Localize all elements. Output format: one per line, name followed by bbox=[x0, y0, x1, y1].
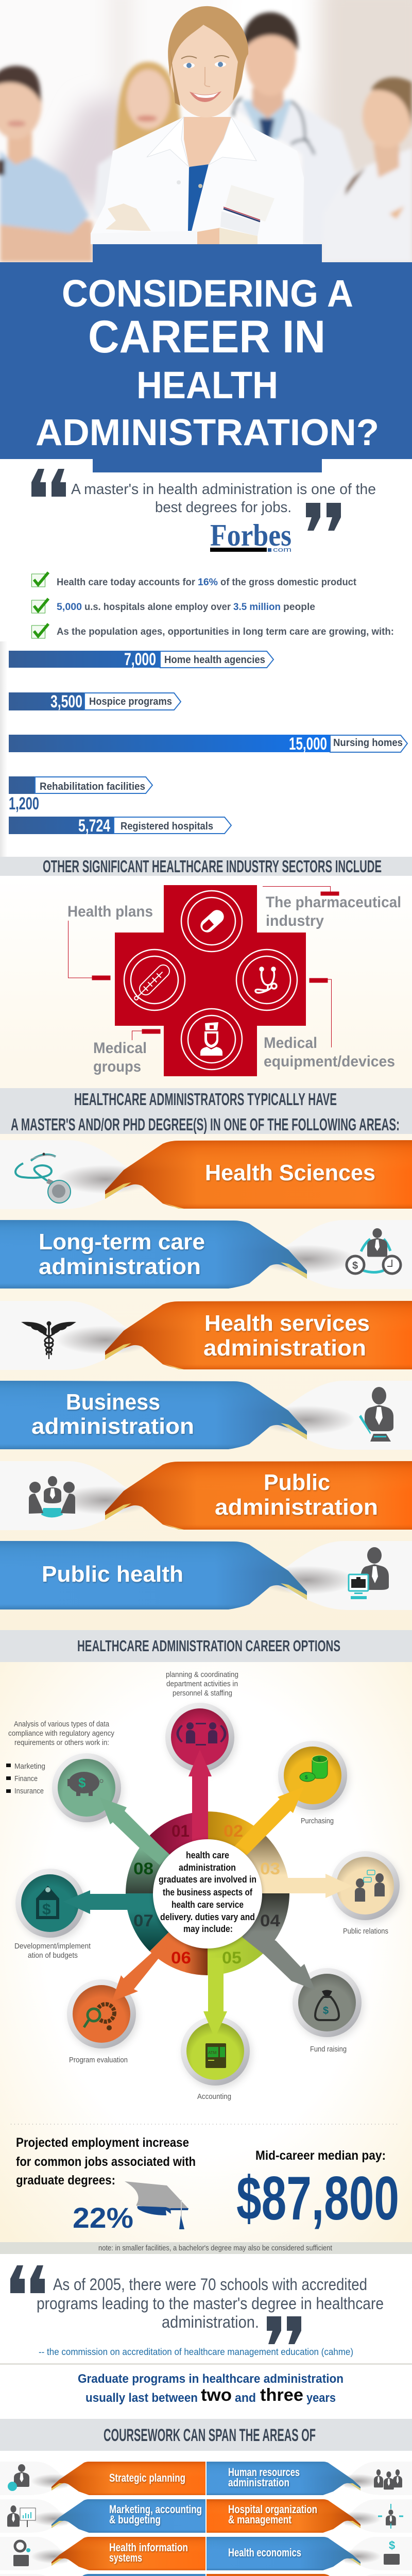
option descriptions bbox=[6, 1670, 388, 2101]
icon: atm bbox=[205, 2043, 226, 2068]
connector lines bbox=[68, 886, 339, 1047]
center doctor bbox=[91, 6, 304, 244]
ribbon: health services administration bbox=[0, 1301, 412, 1370]
icon: piggy bank bbox=[67, 1772, 103, 1796]
sector labels: Medical bbox=[93, 1040, 147, 1057]
blonde nurse, blurred bbox=[94, 62, 181, 216]
icon: magnifier and gear bbox=[84, 2004, 114, 2030]
quote: forbes bbox=[31, 469, 376, 531]
title banner: CONSIDERING A bbox=[62, 272, 353, 315]
bar chart: long term care facilities: Rehabilitation facilities bbox=[40, 781, 145, 792]
sector labels: equipment/devices bbox=[264, 1053, 395, 1070]
option descriptions: ation of budgets bbox=[28, 1951, 78, 1960]
sector labels: Medical bbox=[264, 1035, 317, 1052]
heading: coursework bbox=[0, 2419, 412, 2451]
sector labels: industry bbox=[266, 912, 324, 929]
row 1: Strategic planning bbox=[109, 2471, 185, 2484]
segment numbers: 06 bbox=[171, 1948, 191, 1967]
icon: pill bbox=[198, 907, 227, 935]
icon: stethoscope bbox=[15, 1153, 71, 1203]
note band bbox=[0, 2242, 412, 2254]
ribbon: long-term care: Long-term care bbox=[39, 1229, 205, 1255]
option descriptions: Development/implement bbox=[14, 1942, 91, 1951]
checklist facts: As the population ages, opportunities in long term care are growing, with: bbox=[57, 626, 394, 637]
ribbon: public health: Public health bbox=[42, 1562, 183, 1587]
ribbon: long-term care: administration bbox=[39, 1254, 201, 1279]
program length text: years bbox=[306, 2391, 336, 2405]
forbes logo: Forbes bbox=[210, 518, 291, 552]
forbes logo: com bbox=[273, 546, 291, 553]
center circle text: may include: bbox=[183, 1924, 233, 1934]
icon: money bag bbox=[315, 1990, 339, 2020]
option descriptions: compliance with regulatory agency bbox=[8, 1729, 114, 1738]
program length text: usually last between bbox=[85, 2391, 198, 2405]
segment numbers: 07 bbox=[133, 1911, 153, 1930]
stat: mid-career median pay: Mid-career median pay: bbox=[255, 2148, 386, 2163]
center circle text: administration bbox=[179, 1862, 236, 1873]
program length text: and bbox=[235, 2391, 256, 2405]
icon: nurse bbox=[200, 1022, 222, 1056]
bar chart: long term care facilities: Registered hospitals bbox=[121, 821, 213, 832]
segment numbers: 02 bbox=[224, 1822, 243, 1840]
row 3: Health information bbox=[109, 2541, 188, 2554]
ribbon: health services administration: Health services bbox=[204, 1311, 370, 1336]
stat: projected employment increase bbox=[16, 2136, 196, 2234]
icon: person, dollar and clock bbox=[347, 1228, 401, 1274]
bar chart: long term care facilities: 5,724 bbox=[78, 816, 110, 836]
checklist facts: 16% bbox=[198, 577, 218, 588]
bar chart: long term care facilities: 3,500 bbox=[50, 692, 82, 711]
option descriptions: Analysis of various types of data bbox=[14, 1720, 110, 1728]
icon: coins: $ bbox=[305, 1775, 308, 1781]
bar chart: long term care facilities: Home health agencies bbox=[164, 654, 265, 666]
arrows bbox=[63, 1750, 352, 2038]
center circle text: graduates are involved in bbox=[159, 1874, 256, 1885]
title banner: ADMINISTRATION? bbox=[36, 412, 379, 453]
option descriptions: Accounting bbox=[197, 2092, 231, 2101]
program length text: three bbox=[260, 2385, 303, 2405]
sector labels: groups bbox=[93, 1058, 141, 1075]
option descriptions: Finance bbox=[14, 1774, 38, 1783]
program length text: Graduate programs in healthcare administration bbox=[78, 2372, 344, 2386]
icon: caduceus bbox=[21, 1321, 76, 1359]
option descriptions: personnel & staffing bbox=[173, 1689, 232, 1698]
option descriptions: requirements or others work in: bbox=[14, 1738, 109, 1747]
checklist facts: u.s. hospitals alone employ over bbox=[84, 602, 231, 613]
row 3: systems bbox=[109, 2551, 142, 2564]
icon: person, dollar and clock: $ bbox=[352, 1260, 358, 1272]
checklist facts: people bbox=[283, 602, 315, 613]
quote: accredited schools: administration. bbox=[162, 2313, 259, 2331]
icon: two people meeting bbox=[176, 1722, 227, 1745]
row 4 bbox=[0, 2574, 412, 2576]
bar chart: long term care facilities: Nursing homes bbox=[333, 737, 403, 749]
left nurse, blurred bbox=[0, 66, 93, 262]
row 2: Marketing, accounting bbox=[109, 2503, 202, 2516]
bar chart: long term care facilities: 15,000 bbox=[289, 734, 327, 754]
hero photo: healthcare team bbox=[0, 0, 412, 268]
option descriptions: Insurance bbox=[14, 1787, 44, 1795]
row 2: & budgeting bbox=[109, 2513, 161, 2526]
title banner: HEALTH bbox=[136, 364, 278, 406]
quote: accredited schools: As of 2005, there were 70 schools with accredited bbox=[53, 2275, 367, 2294]
coursework ribbons bbox=[0, 2462, 412, 2576]
stat: projected employment increase: for common jobs associated with bbox=[16, 2155, 196, 2169]
ribbon: public administration: administration bbox=[215, 1495, 378, 1520]
segment numbers: 08 bbox=[133, 1859, 153, 1878]
checklist facts: of the gross domestic product bbox=[220, 577, 357, 588]
ribbon: public administration: Public bbox=[264, 1470, 330, 1495]
icon: coins: $ bbox=[318, 1757, 321, 1762]
stat: projected employment increase: 22% bbox=[73, 2201, 133, 2234]
icon: person with computer bbox=[349, 1547, 389, 1599]
ribbon: public administration bbox=[0, 1461, 412, 1530]
ribbon: business administration bbox=[0, 1381, 412, 1450]
ring segments bbox=[126, 1811, 289, 1975]
row 2: Hospital organization bbox=[228, 2503, 317, 2516]
checklist facts: 3.5 million bbox=[233, 602, 281, 613]
coursework icons bbox=[7, 2464, 403, 2576]
center circle text: health care bbox=[186, 1850, 229, 1860]
program length text bbox=[78, 2372, 344, 2405]
title banner: CAREER IN bbox=[88, 311, 325, 362]
heading: career options bbox=[0, 1630, 412, 1662]
program length text: two bbox=[201, 2385, 232, 2405]
icon: three people bbox=[29, 1476, 75, 1518]
row 1: administration bbox=[228, 2476, 289, 2489]
center circle text: health care service bbox=[171, 1900, 244, 1910]
bar chart: long term care facilities: 1,200 bbox=[9, 794, 39, 814]
icon: price tag bbox=[36, 1886, 59, 1919]
male doctor, blurred bbox=[231, 12, 355, 244]
note band: note: in smaller facilities, a bachelor's degree may also be considered sufficient bbox=[98, 2244, 333, 2252]
segment numbers bbox=[133, 1822, 280, 1967]
ribbon: health sciences: Health Sciences bbox=[205, 1160, 375, 1185]
row 2: & management bbox=[228, 2513, 292, 2526]
quote: forbes: best degrees for jobs. bbox=[155, 499, 291, 516]
row 3: Health economics bbox=[228, 2546, 301, 2559]
segment numbers: 04 bbox=[260, 1911, 280, 1930]
bar chart: long term care facilities: 7,000 bbox=[124, 650, 156, 669]
diagram: eight career options bbox=[6, 1670, 402, 2101]
center circle text: delivery. duties vary and bbox=[160, 1912, 255, 1922]
ribbon: public health bbox=[0, 1541, 412, 1610]
heading: degree areas bbox=[0, 1088, 412, 1134]
option circles bbox=[15, 1703, 402, 2089]
sector labels: The pharmaceutical bbox=[266, 894, 401, 911]
stat: projected employment increase: Projected employment increase bbox=[16, 2136, 189, 2150]
option descriptions: Public relations bbox=[343, 1927, 388, 1936]
bar chart: long term care facilities: Hospice programs bbox=[89, 696, 172, 707]
bar chart: long term care facilities bbox=[9, 650, 407, 836]
stat: projected employment increase: graduate degrees: bbox=[16, 2173, 115, 2188]
coursework icons: $ bbox=[389, 2539, 395, 2552]
checklist facts: Health care today accounts for bbox=[57, 577, 196, 588]
quote: accredited schools: -- the commission on accreditation of healthcare management education (cahme) bbox=[39, 2347, 353, 2357]
icon: stethoscope bbox=[255, 968, 277, 993]
icon: price tag: $ bbox=[42, 1901, 51, 1918]
ribbon: business administration: Business bbox=[66, 1389, 160, 1415]
row 2 bbox=[0, 2499, 412, 2533]
icon: two people talking bbox=[355, 1870, 385, 1902]
ribbon: health sciences bbox=[0, 1140, 412, 1209]
row 1 bbox=[0, 2462, 412, 2495]
option descriptions: Purchasing bbox=[301, 1817, 334, 1825]
right nurse, blurred bbox=[322, 77, 412, 262]
option descriptions: planning & coordinating bbox=[166, 1670, 238, 1679]
icon: person with pen bbox=[359, 1387, 393, 1442]
segment numbers: 01 bbox=[171, 1822, 190, 1840]
row 1: Human resources bbox=[228, 2466, 300, 2479]
quote: forbes: A master's in health administration is one of the bbox=[71, 481, 376, 498]
icon: graduation cap bbox=[125, 2181, 188, 2229]
segment numbers: 03 bbox=[260, 1859, 280, 1878]
center circle text bbox=[153, 1839, 262, 1950]
icon: thermometer bbox=[131, 962, 172, 1004]
option descriptions: Program evaluation bbox=[69, 2056, 128, 2064]
sector labels: Health plans bbox=[67, 903, 153, 920]
checklist facts: 5,000 bbox=[57, 602, 82, 613]
row 3 bbox=[0, 2537, 412, 2570]
icon: coins bbox=[300, 1755, 328, 1782]
ribbon: health services administration: administration bbox=[203, 1335, 366, 1361]
option descriptions: Fund raising bbox=[310, 2045, 347, 2054]
medical cross with sector icons bbox=[115, 885, 306, 1076]
icon: atm: ATM bbox=[208, 2050, 217, 2055]
icon: piggy bank: $ bbox=[78, 1775, 86, 1790]
option descriptions: department activities in bbox=[166, 1680, 238, 1688]
option descriptions: Marketing bbox=[14, 1762, 45, 1771]
title banner bbox=[0, 244, 412, 472]
ribbon: business administration: administration bbox=[31, 1414, 194, 1439]
checklist facts bbox=[32, 572, 394, 638]
segment numbers: 05 bbox=[222, 1948, 242, 1967]
icon: money bag: $ bbox=[323, 2005, 329, 2016]
center circle text: the business aspects of bbox=[163, 1887, 253, 1897]
ribbon: long-term care bbox=[0, 1220, 412, 1289]
quote: accredited schools bbox=[10, 2265, 384, 2357]
sector labels bbox=[67, 894, 401, 1075]
